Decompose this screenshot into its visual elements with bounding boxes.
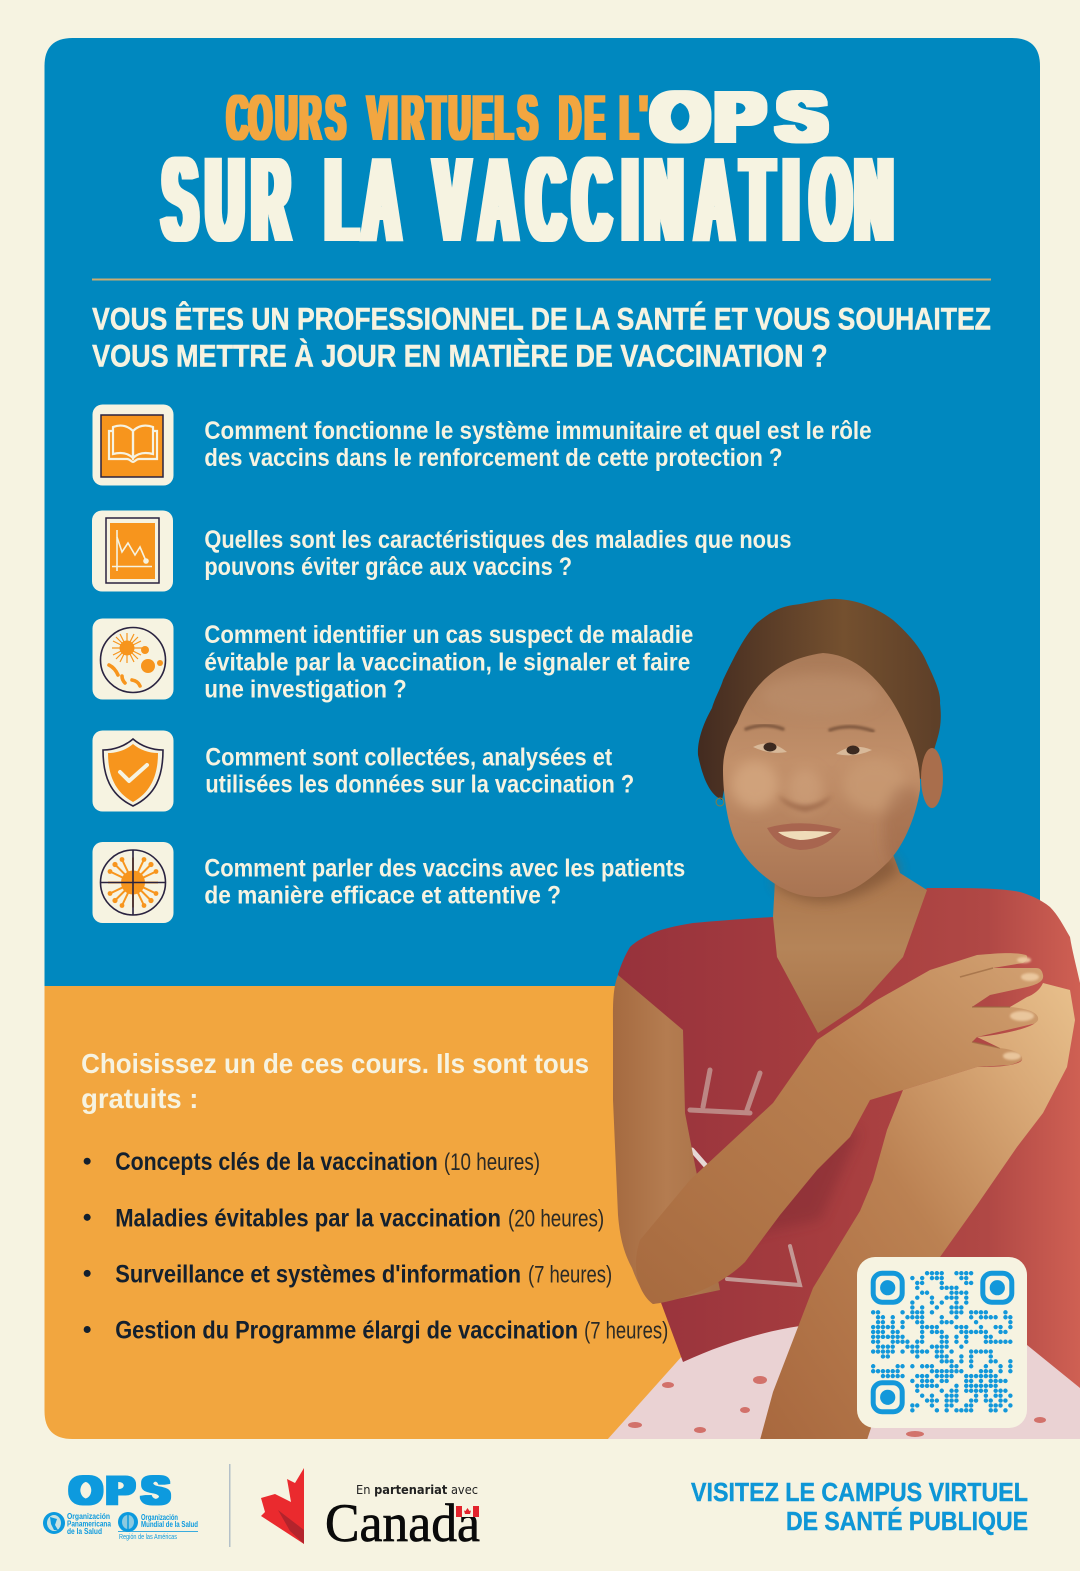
logo: OPS with organization marks: de la Salud [67, 1527, 102, 1536]
shadow on shirt under forearm [769, 1132, 856, 1230]
emblem: PAHO globe [43, 1512, 65, 1534]
course list [84, 1148, 668, 1345]
QR modules [873, 1273, 1010, 1410]
face [723, 653, 927, 897]
folded arm and hand [636, 953, 1043, 1304]
title [163, 79, 892, 267]
question 3 text: une investigation ? [204, 675, 407, 703]
question 4 text: utilisées les données sur la vaccination ? [205, 771, 634, 799]
subheading question: VOUS METTRE À JOUR EN MATIÈRE DE VACCINATION ? [92, 339, 828, 374]
icon: microbes [92, 618, 174, 700]
knuckle shading [960, 968, 1010, 1048]
title line two: sur la vaccination: SUR LA VACCINATION [163, 131, 892, 267]
left upper arm [613, 975, 720, 1304]
logo: OPS with organization marks: Panamericana [67, 1520, 111, 1528]
question 1 text: des vaccins dans le renforcement de cette protection ? [204, 444, 782, 472]
question 2 text: Quelles sont les caractéristiques des maladies que nous [204, 526, 791, 554]
partnership text and Canada wordmark: Canada [325, 1493, 480, 1553]
logo: OPS with organization marks: Región de las Américas [119, 1534, 177, 1541]
question 3 text: évitable par la vaccination, le signaler et faire [204, 648, 690, 676]
course list: (10 heures) [444, 1149, 540, 1176]
chest and neck [773, 856, 927, 1033]
emblem: WHO globe [118, 1512, 138, 1532]
partnership text and Canada wordmark: En partenariat avec [356, 1482, 478, 1497]
panel: blue question section [44, 38, 1040, 986]
question 5 text: Comment parler des vaccins avec les patients [204, 855, 685, 883]
hair [698, 599, 941, 800]
panel: orange course section [44, 986, 1040, 1439]
earring [716, 798, 724, 806]
question 1 text [204, 417, 872, 472]
courses heading: gratuits : [81, 1083, 198, 1114]
ear [921, 748, 943, 808]
courses heading: Choisissez un de ces cours. Ils sont tous [81, 1048, 589, 1079]
eyes [753, 742, 872, 755]
course list: (20 heures) [508, 1205, 604, 1232]
question 4 text [205, 743, 634, 799]
question 4 text: Comment sont collectées, analysées et [205, 743, 613, 771]
shorts [607, 1322, 1080, 1440]
question 3 text [204, 621, 693, 703]
courses heading [81, 1048, 589, 1114]
icon: virus crosshair [92, 842, 174, 923]
icon: chart [92, 510, 173, 592]
shirt [618, 888, 1080, 1388]
fingertip highlights [1003, 957, 1039, 1060]
QR code card [857, 1257, 1027, 1428]
OPS wordmark: OPS [69, 1468, 170, 1513]
subheading question [92, 301, 991, 374]
call to action: campus virtuel: DE SANTÉ PUBLIQUE [786, 1507, 1028, 1536]
logo: OPS with organization marks [43, 1468, 198, 1541]
logo: OPS with organization marks: Organización [67, 1512, 110, 1521]
mouth [767, 823, 841, 850]
brows [746, 726, 873, 731]
icon: Canadian flag [456, 1506, 479, 1517]
question 1 text: Comment fonctionne le système immunitaire et quel est le rôle [204, 417, 872, 445]
title logotype: OPS: OPS [651, 79, 826, 157]
question 5 text: de manière efficace et attentive ? [204, 882, 561, 910]
question 5 text [204, 855, 685, 910]
icon: shield [92, 730, 174, 812]
question 3 text: Comment identifier un cas suspect de maladie [204, 621, 693, 649]
logo: OPS with organization marks: Organización [141, 1513, 178, 1522]
nose [780, 797, 830, 813]
call to action: campus virtuel [691, 1479, 1028, 1536]
course list: (7 heures) [584, 1318, 668, 1345]
shadow under chin [775, 855, 900, 902]
question 2 text [204, 526, 791, 581]
forehead and cheek highlights [730, 680, 919, 858]
course list: (7 heures) [528, 1261, 612, 1288]
course list: Concepts clés de la vaccination [115, 1148, 438, 1176]
course list: Surveillance et systèmes d'information [115, 1260, 521, 1288]
QR finder patterns [873, 1273, 1012, 1412]
right arm [760, 983, 1075, 1440]
icon: open book [92, 404, 174, 486]
shirt print [690, 1070, 800, 1285]
course list: Maladies évitables par la vaccination [115, 1204, 501, 1232]
call to action: campus virtuel: VISITEZ LE CAMPUS VIRTUEL [691, 1479, 1028, 1507]
logo: OPS with organization marks: Mundial de la Salud [141, 1520, 198, 1529]
course list: Gestion du Programme élargi de vaccination [115, 1317, 578, 1345]
question 2 text: pouvons éviter grâce aux vaccins ? [204, 553, 572, 581]
title line one: cours virtuels: COURS VIRTUELS DE L' [227, 81, 647, 154]
logo: Canada red leaf [261, 1468, 304, 1544]
photo: smiling woman holding her vaccinated arm [607, 599, 1080, 1440]
